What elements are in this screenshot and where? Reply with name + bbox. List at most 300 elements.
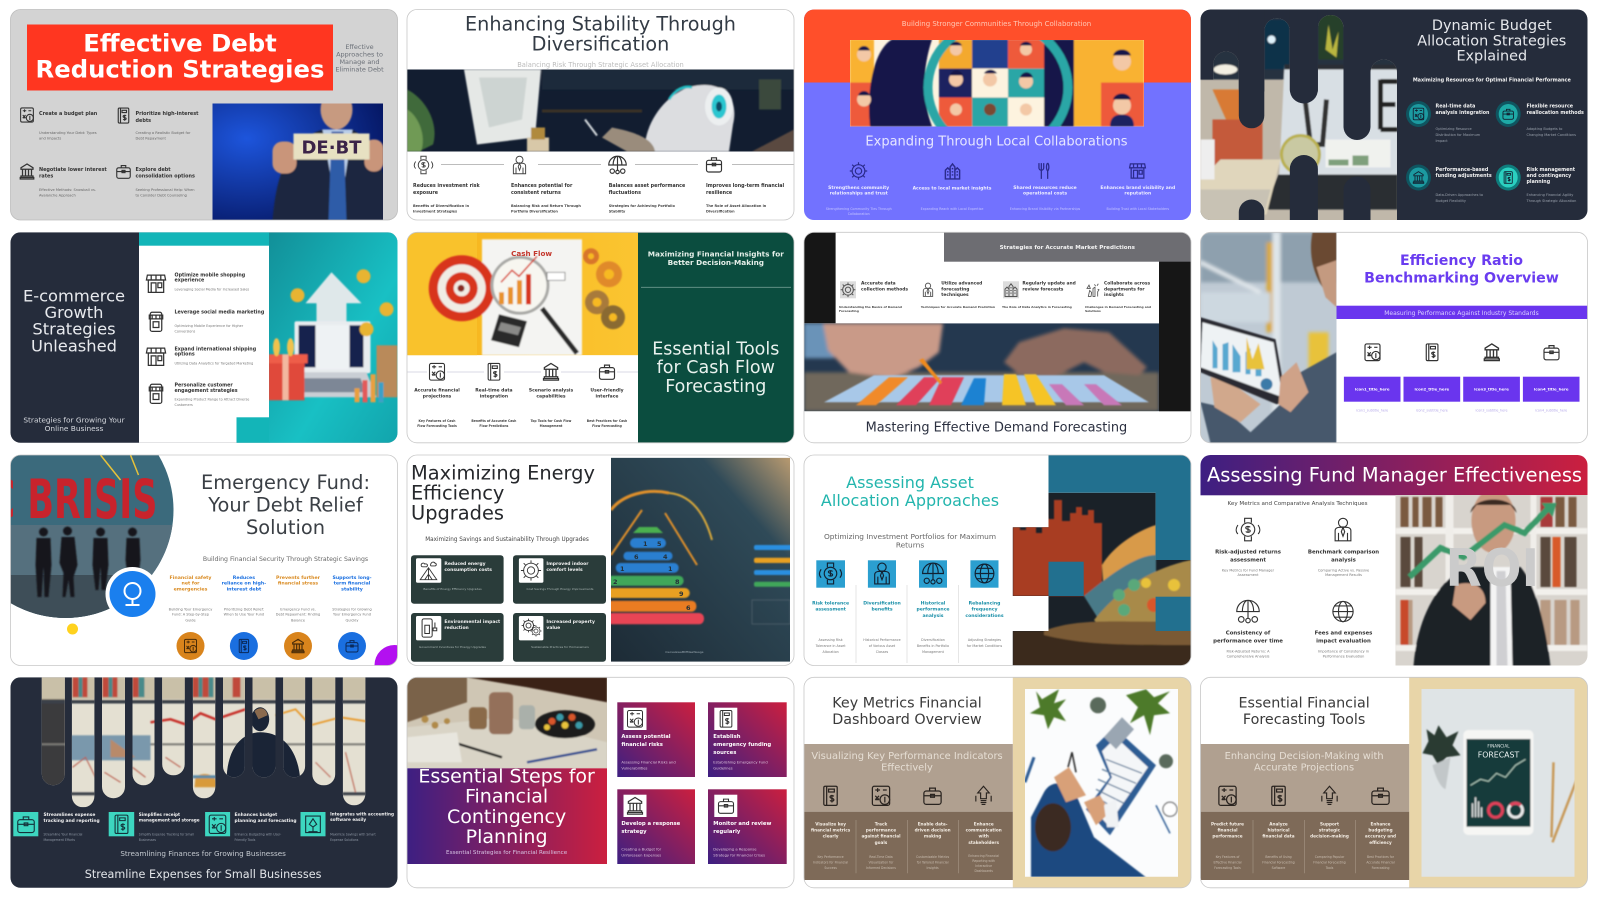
card: energy costs xyxy=(411,555,504,604)
item: long-term resilience xyxy=(706,158,784,213)
item subtitle: Enhancing Brand Visibility via Partnerships xyxy=(1010,207,1081,211)
item subtitle: Importance of Consistency in xyxy=(1318,650,1369,654)
icon: calculator xyxy=(21,108,33,122)
item subtitle: Building Trust with Local Stakeholders xyxy=(1107,207,1169,211)
tablet heading: FORECAST xyxy=(1478,750,1519,759)
item title: benefits xyxy=(871,607,893,613)
column title: Predict future xyxy=(1211,821,1244,826)
column title: interest debt xyxy=(227,586,262,592)
icon: bank xyxy=(1484,344,1499,361)
item subtitle: Maximize Savings with Smart xyxy=(330,832,377,836)
icon badge xyxy=(284,632,312,660)
item subtitle: Flow Forecasting Tools xyxy=(417,424,457,428)
column: analyze data xyxy=(1262,786,1295,870)
card subtitle: Unforeseen Expenses xyxy=(621,854,661,858)
item: market insights xyxy=(913,164,992,211)
item title: collection methods xyxy=(861,286,908,292)
icon: umbrella xyxy=(1237,600,1259,623)
item: budget plan xyxy=(21,108,98,140)
item subtitle: Creating a Realistic Budget for xyxy=(136,131,191,135)
item: flexible resources xyxy=(1496,101,1584,137)
icon tile: ledger xyxy=(109,812,134,836)
column title: Reduces xyxy=(233,575,255,581)
icon badge xyxy=(1406,101,1431,127)
icon tile: umbrella xyxy=(919,560,947,588)
item: risk tolerance xyxy=(812,560,849,654)
decorative purple circle xyxy=(374,645,414,685)
icon tile: watch xyxy=(816,560,845,588)
title banner: Effective Debt xyxy=(83,28,277,58)
item: icon 3 xyxy=(1463,344,1520,412)
item title: Explore debt xyxy=(136,167,171,173)
card title: reduction xyxy=(444,625,469,631)
item: icon 1 xyxy=(1344,344,1400,412)
item subtitle: Comprehensive Analysis xyxy=(1227,654,1270,658)
item subtitle: Debt Repayment xyxy=(136,136,166,140)
item title: consolidation options xyxy=(136,174,195,180)
card subtitle: Sustainable Practices for Homeowners xyxy=(531,645,589,649)
item title: Risk management xyxy=(1526,167,1576,173)
title: Key Metrics Financial xyxy=(832,695,982,711)
card subtitle: Establishing Emergency Fund xyxy=(713,760,768,764)
item subtitle: Adapting Budgets to xyxy=(1526,127,1562,131)
item title: Risk tolerance xyxy=(812,600,849,606)
item title: interface xyxy=(596,393,618,399)
card title: Improved indoor xyxy=(546,561,589,567)
item subtitle: Strategies for Achieving Portfolio xyxy=(609,204,676,208)
item title: engagement strategies xyxy=(174,388,238,394)
column subtitle: Success xyxy=(824,866,837,870)
photo: tablet with financial forecast xyxy=(1422,689,1574,877)
column: long-term stability xyxy=(332,575,372,660)
column title: Enhance xyxy=(974,821,994,826)
icon: city xyxy=(945,164,960,179)
title: Allocation Approaches xyxy=(821,491,999,510)
icon: ledger xyxy=(1272,786,1285,805)
item subtitle: Benefits of Diversification in xyxy=(413,204,470,208)
card: environmental impact xyxy=(411,613,504,662)
tablet text: FINANCIAL xyxy=(1487,743,1510,748)
item title: Optimize mobile shopping xyxy=(174,272,246,278)
title banner xyxy=(27,24,333,90)
chart numerals: 2 xyxy=(613,578,618,586)
subtitle: Optimizing Investment Portfolios for Maximum xyxy=(824,532,996,541)
photo: analyst viewing charts through slats xyxy=(40,677,368,812)
item title: capabilities xyxy=(536,393,566,399)
icon: watch xyxy=(1236,518,1260,541)
title: Assessing Asset xyxy=(846,473,974,492)
item subtitle: icon4_subtitle_here xyxy=(1535,408,1567,412)
chart numerals: 6 xyxy=(634,553,639,561)
item title: analysis xyxy=(922,613,944,619)
item: user-friendly interface xyxy=(587,361,627,428)
column title: budgeting xyxy=(1368,827,1393,832)
item subtitle: Benefits in Portfolio xyxy=(917,644,949,648)
item subtitle: Risk-Adjusted Returns: A xyxy=(1226,650,1270,654)
item subtitle: Streamline Your Financial xyxy=(44,832,83,836)
item title: frequency xyxy=(971,607,998,613)
item subtitle: Comparing Active vs. Passive xyxy=(1318,568,1369,572)
item title: Balances asset performance xyxy=(609,183,686,189)
title: Dashboard Overview xyxy=(832,712,982,728)
title: Upgrades xyxy=(411,502,504,524)
icon: ledger xyxy=(714,708,737,730)
column subtitle: Financial Forecasting xyxy=(1262,860,1295,864)
title: Enhancing Stability Through xyxy=(465,12,736,36)
item: receipt management xyxy=(109,812,200,842)
title: Mastering Effective Demand Forecasting xyxy=(866,420,1127,435)
chart numerals: 1 xyxy=(668,565,673,573)
subtitle: Building Financial Security Through Strategic Savings xyxy=(203,556,368,563)
column subtitle: Your Emergency Fund xyxy=(333,613,371,617)
icon: ledger xyxy=(118,108,129,123)
icon: gear xyxy=(519,558,543,583)
subtitle: Visualizing Key Performance Indicators xyxy=(811,751,1003,762)
item title: Enhances budget xyxy=(234,812,277,818)
column subtitle: Comparing Popular xyxy=(1315,855,1345,859)
column title: financial metrics xyxy=(811,827,851,832)
item subtitle: and Impacts xyxy=(39,136,61,140)
title: Efficiency Ratio xyxy=(1400,253,1523,269)
item title: forecasting xyxy=(941,286,969,292)
column subtitle: Emergency Fund vs. xyxy=(280,607,316,611)
subtitle: Returns xyxy=(896,541,924,550)
column title: reliance on high- xyxy=(222,581,266,587)
column subtitle: When to Use Your Fund xyxy=(224,613,264,617)
icon: chart tile xyxy=(1003,281,1019,298)
card: property value xyxy=(513,613,606,662)
column title: communication xyxy=(966,827,1002,832)
icon: globe xyxy=(1333,601,1353,622)
column subtitle: Indicators for Financial xyxy=(813,860,848,864)
title: Essential Steps for xyxy=(418,765,595,787)
item subtitle: Classes xyxy=(876,650,888,654)
title: for Cash Flow xyxy=(657,358,775,378)
item subtitle: Stability xyxy=(609,209,626,213)
icon: person xyxy=(513,156,526,174)
column: strategic decisions xyxy=(1310,786,1349,870)
column subtitle: Financial Forecasting xyxy=(1313,860,1346,864)
item: high-interest debts xyxy=(118,108,199,140)
subtitle: Building Stronger Communities Through Collaboration xyxy=(902,20,1091,28)
item title: experience xyxy=(174,278,205,284)
photo: coin jars on financial papers xyxy=(407,678,607,768)
icon: briefcase xyxy=(924,788,941,804)
icon: mobile store xyxy=(149,312,163,331)
item: shared resources xyxy=(1010,163,1081,211)
item subtitle: Enhance Budgeting with User- xyxy=(234,832,281,836)
item subtitle: Solutions xyxy=(1085,309,1101,313)
item title: reallocation methods xyxy=(1526,110,1584,116)
title: Benchmarking Overview xyxy=(1364,270,1559,286)
subtitle: Strategies for Growing Your xyxy=(23,415,126,424)
puzzle lettering: DE·BT xyxy=(301,138,362,158)
card title: emergency funding xyxy=(713,742,771,748)
column subtitle: Forecasting xyxy=(1372,866,1389,870)
illustration: laptop with growth arrow xyxy=(269,232,398,443)
item: brand visibility xyxy=(1100,164,1175,211)
column title: emergencies xyxy=(174,586,208,592)
panel: Efficiency Ratio Benchmarking Overview xyxy=(1200,232,1588,443)
item subtitle: Collaboration xyxy=(848,212,870,216)
item subtitle: Flow Predictions xyxy=(479,424,509,428)
icon: bank xyxy=(20,164,34,179)
column subtitle: Dashboards xyxy=(974,869,993,873)
item subtitle: Data-Driven Approaches to xyxy=(1436,193,1483,197)
item title: analysis xyxy=(1331,558,1356,564)
column title: performance xyxy=(1212,834,1243,839)
item title: Rebalancing xyxy=(969,600,1000,606)
subtitle: Better Decision-Making xyxy=(668,258,764,267)
subtitle: Streamlining Finances for Growing Businesses xyxy=(120,849,286,858)
item subtitle: Flow Forecasting xyxy=(592,424,622,428)
photo: robot drawing at easel xyxy=(407,70,794,152)
column: track performance xyxy=(861,786,901,870)
item: debt consolidation xyxy=(117,166,195,198)
item title: Historical xyxy=(921,600,946,606)
column title: Analyze xyxy=(1269,821,1288,826)
column title: Track xyxy=(875,821,887,826)
column title: clearly xyxy=(823,834,839,839)
icon: bank xyxy=(541,361,561,382)
item subtitle: The Role of Data Analytics in Forecasting xyxy=(1002,305,1072,309)
icon: ledger xyxy=(824,786,837,805)
icon: globe badge xyxy=(106,567,160,621)
column title: decision-making xyxy=(1310,834,1349,839)
item title: Accurate financial xyxy=(414,387,460,393)
item title: impact evaluation xyxy=(1316,639,1371,645)
subtitle: Approaches to xyxy=(336,50,383,58)
item title: Integrates with accounting xyxy=(330,811,394,816)
column title: financial data xyxy=(1262,834,1295,839)
item subtitle: Expense Solutions xyxy=(330,838,359,842)
subtitle: Eliminate Debt xyxy=(335,66,384,74)
column subtitle: Key Features of xyxy=(1216,855,1240,859)
column: stakeholder communication xyxy=(966,786,1002,873)
item subtitle: Challenges in Demand Forecasting and xyxy=(1085,305,1151,309)
image: abstract market landscape with blocks xyxy=(1012,455,1192,666)
item title: Fees and expenses xyxy=(1315,631,1372,637)
card title: Reduced energy xyxy=(444,561,486,567)
item subtitle: Impact xyxy=(1436,139,1448,143)
item title: relationships and trust xyxy=(830,191,889,197)
item subtitle: Top Tools for Cash Flow xyxy=(531,419,572,423)
card title: regularly xyxy=(713,829,741,835)
column title: Enable data- xyxy=(918,821,948,826)
icon badge xyxy=(176,632,204,660)
card subtitle: Government Incentives for Energy Upgrades xyxy=(419,645,486,649)
subtitle: Effectively xyxy=(881,763,933,774)
column subtitle: Forecasting Tools xyxy=(1214,866,1241,870)
item: risk-adjusted xyxy=(1215,518,1281,577)
column: predict performance xyxy=(1211,786,1244,870)
item title: reputation xyxy=(1124,191,1151,197)
item subtitle: of Various Asset xyxy=(869,644,896,648)
connector lines xyxy=(441,164,794,165)
item title: Improves long-term financial xyxy=(706,183,784,189)
column subtitle: Real-Time Data xyxy=(869,855,893,859)
item subtitle: Assessment xyxy=(1238,573,1259,577)
label button: icon1_title_here xyxy=(1355,386,1390,392)
item title: planning and forecasting xyxy=(234,818,297,824)
item subtitle: Management xyxy=(540,424,563,428)
item subtitle: Leveraging Social Media for Increased Sales xyxy=(174,287,249,291)
item: negotiate rates xyxy=(20,164,107,198)
column title: financial xyxy=(1217,827,1238,832)
icon tile: globe xyxy=(970,560,998,588)
panel: Emergency Fund: Your Debt Relief Solution xyxy=(0,395,414,685)
item subtitle: to Consider Debt Counseling xyxy=(136,194,187,198)
subtitle: Maximizing Financial Insights for xyxy=(648,249,784,258)
item title: Shared resources reduce xyxy=(1013,185,1077,191)
card: assess risks xyxy=(617,702,695,777)
column title: goals xyxy=(875,840,888,845)
item title: review forecasts xyxy=(1022,286,1064,292)
column subtitle: Guide xyxy=(185,618,196,622)
item subtitle: Portfolio Diversification xyxy=(511,209,558,213)
item subtitle: for Market Conditions xyxy=(967,644,1002,648)
column subtitle: Tools xyxy=(1325,866,1334,870)
card subtitle: Guidelines xyxy=(713,767,733,771)
column title: accuracy and xyxy=(1365,834,1396,839)
item title: Collaborate across xyxy=(1104,281,1150,287)
card subtitle: Strategy for Financial Crises xyxy=(713,854,765,858)
item title: Regularly update and xyxy=(1022,281,1076,287)
item subtitle: Optimizing Mobile Experience for Higher xyxy=(174,324,244,328)
icon badge xyxy=(1496,164,1521,190)
photo: man with tablet in factory xyxy=(1200,232,1336,442)
item subtitle: Budget Flexibility xyxy=(1436,199,1466,203)
card title: Environmental impact xyxy=(444,619,501,625)
card title: Increased property xyxy=(546,619,595,625)
icon: calculator xyxy=(1365,344,1380,361)
icon: ledger xyxy=(1426,344,1438,361)
title banner: Reduction Strategies xyxy=(36,54,324,84)
title: Contingency xyxy=(447,806,566,828)
item title: Consistency of xyxy=(1226,631,1271,637)
item: balances performance xyxy=(609,156,686,213)
column subtitle: Debt Repayment: Finding xyxy=(276,613,320,617)
item: performance funding xyxy=(1406,164,1492,203)
item title: management and storage xyxy=(139,817,200,822)
item subtitle: Tolerance in Asset xyxy=(815,644,846,648)
item subtitle: Utilizing Data Analytics for Targeted Marketing xyxy=(174,362,253,366)
item subtitle: Avalanche Approach xyxy=(39,194,76,198)
item: scenario analysis xyxy=(529,361,573,428)
item title: techniques xyxy=(941,292,969,298)
column title: strategic xyxy=(1319,827,1341,832)
column: visualize metrics xyxy=(811,786,851,870)
column: financial safety net xyxy=(169,575,212,660)
icon: cutlery xyxy=(1039,163,1049,179)
card: monitor and review xyxy=(708,789,787,864)
item title: Create a budget plan xyxy=(39,111,98,117)
item subtitle: Distribution for Maximum xyxy=(1436,133,1481,137)
main heading: Expanding Through Local Collaborations xyxy=(865,134,1128,150)
column title: efficiency xyxy=(1369,840,1392,845)
illustration: community portraits xyxy=(850,40,1144,126)
column subtitle: Quickly xyxy=(346,618,358,622)
label button: icon3_title_here xyxy=(1474,386,1509,392)
item title: planning xyxy=(1526,179,1551,185)
column subtitle: Prioritizing Debt Relief: xyxy=(224,607,264,611)
item title: Utilize advanced xyxy=(941,281,982,287)
icon: watch xyxy=(414,156,433,174)
icon: calculator xyxy=(872,786,890,805)
icon badge xyxy=(338,632,366,660)
item subtitle: Balancing Risk and Return Through xyxy=(511,204,581,208)
item subtitle: Diversification xyxy=(921,638,945,642)
photo: hand marking a bar chart xyxy=(804,323,1159,412)
item subtitle: Historical Performance xyxy=(863,638,901,642)
label button: icon2_title_here xyxy=(1414,386,1449,392)
item subtitle: icon2_subtitle_here xyxy=(1416,408,1448,412)
title: Maximizing Energy xyxy=(411,462,595,484)
column subtitle: Software xyxy=(1272,866,1285,870)
title: Financial xyxy=(465,785,548,807)
item subtitle: Effective Methods: Snowball vs. xyxy=(39,188,96,192)
decorative yellow dot xyxy=(67,624,78,634)
icon: gears xyxy=(519,616,543,640)
item title: Access to local market insights xyxy=(913,186,992,192)
column subtitle: Enhancing Financial xyxy=(968,854,999,858)
item subtitle: Expanding Reach with Local Expertise xyxy=(921,207,983,211)
item title: Risk-adjusted returns xyxy=(1215,550,1281,556)
chart numerals: 4 xyxy=(663,553,668,561)
item subtitle: Investment Strategies xyxy=(413,209,457,213)
item subtitle: Optimizing Resource xyxy=(1436,127,1472,131)
panel: Assessing Fund Manager Effectiveness xyxy=(1200,455,1588,666)
card title: sources xyxy=(713,750,736,756)
column: prevents stress xyxy=(276,575,321,660)
column subtitle: Reporting with xyxy=(972,859,995,863)
item subtitle: Simplify Expense Tracking for Small xyxy=(139,832,194,836)
title: Emergency Fund: xyxy=(201,471,370,494)
item subtitle: Understanding Your Debt: Types xyxy=(39,131,97,135)
chart numerals: 6 xyxy=(686,604,691,612)
item title: and contingency xyxy=(1526,173,1572,179)
column title: stakeholders xyxy=(968,840,999,845)
item title: debts xyxy=(136,118,151,124)
item title: Negotiate lower interest xyxy=(39,167,107,173)
subtitle band xyxy=(1336,306,1588,319)
chart numerals: 1 xyxy=(643,540,648,548)
icon: gear head xyxy=(840,281,856,298)
icon: briefcase xyxy=(1372,788,1389,804)
item subtitle: Diversification xyxy=(706,209,735,213)
item title: exposure xyxy=(413,190,439,196)
column title: with xyxy=(979,834,989,839)
item subtitle: Key Metrics for Fund Manager xyxy=(1222,568,1275,572)
card title: strategy xyxy=(621,829,647,835)
card: indoor comfort xyxy=(513,555,606,604)
subtitle: Manage and xyxy=(339,58,380,66)
column: data-driven decisions xyxy=(915,788,951,870)
panel: Essential Financial Forecasting Tools xyxy=(1200,677,1588,888)
card subtitle: Creating a Budget for xyxy=(621,847,662,851)
subtitle: Maximizing Savings and Sustainability Through Upgrades xyxy=(425,537,589,543)
item: update forecasts xyxy=(1002,281,1076,309)
icon: briefcase xyxy=(597,361,617,382)
item: icon 4 xyxy=(1523,346,1580,412)
item subtitle: icon1_subtitle_here xyxy=(1356,408,1388,412)
item title: software easily xyxy=(330,817,366,822)
item subtitle: Performance Evaluation xyxy=(1323,654,1364,658)
panel: Streamline Expenses for Small Businesses xyxy=(10,677,398,888)
chart numerals: 8 xyxy=(675,578,680,586)
title band xyxy=(1200,455,1588,495)
item: budget planning xyxy=(205,812,297,842)
